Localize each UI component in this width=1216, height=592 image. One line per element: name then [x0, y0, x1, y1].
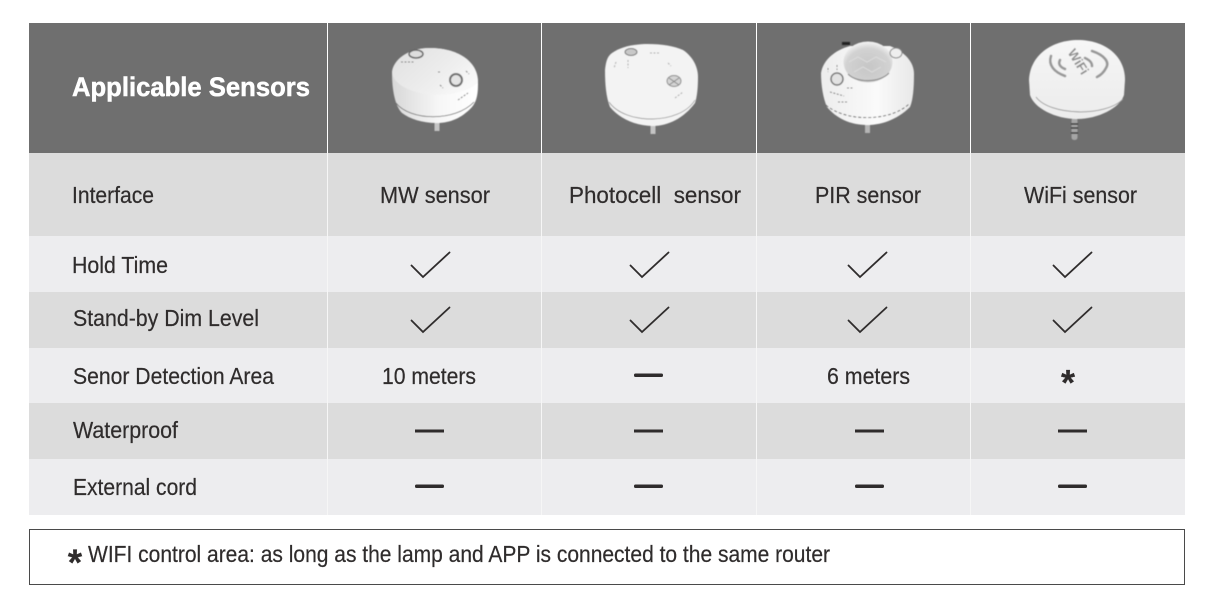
detection area values: 6 meters [827, 363, 910, 389]
row labels: Waterproof [73, 417, 179, 443]
table row backgrounds [29, 153, 1185, 515]
icon: WiFi sensor: WiFi [1065, 46, 1092, 77]
row labels: Hold Time [72, 252, 168, 278]
row labels: Interface [72, 182, 154, 208]
footnote box: * [68, 542, 83, 583]
footnote box: WIFI control area: as long as the lamp and APP is connected to the same router [88, 541, 830, 567]
column labels: interface row: MW sensor [380, 182, 490, 208]
heading: Applicable Sensors: Applicable Sensors [72, 72, 310, 102]
footnote box [30, 530, 1184, 584]
icon: Photocell sensor [605, 44, 698, 134]
check marks: hold time and stand-by dim level [412, 252, 1092, 332]
icon: WiFi sensor [1029, 40, 1125, 140]
column labels: interface row: PIR sensor [815, 182, 921, 208]
dash marks: waterproof and external cord [415, 430, 1087, 488]
column labels: interface row: Photocell sensor [569, 182, 741, 208]
row labels: External cord [73, 474, 197, 500]
column labels: interface row [380, 182, 1137, 208]
detection area values: 10 meters [382, 363, 476, 389]
icon: MW sensor [392, 48, 478, 131]
detection area values [382, 362, 1075, 403]
row labels: Stand-by Dim Level [73, 305, 259, 331]
icon: PIR sensor [821, 42, 914, 133]
row labels: Senor Detection Area [73, 363, 274, 389]
column labels: interface row: WiFi sensor [1024, 182, 1137, 208]
row labels [72, 182, 274, 500]
table header band [29, 23, 1185, 153]
detection area values: * [1061, 362, 1075, 403]
